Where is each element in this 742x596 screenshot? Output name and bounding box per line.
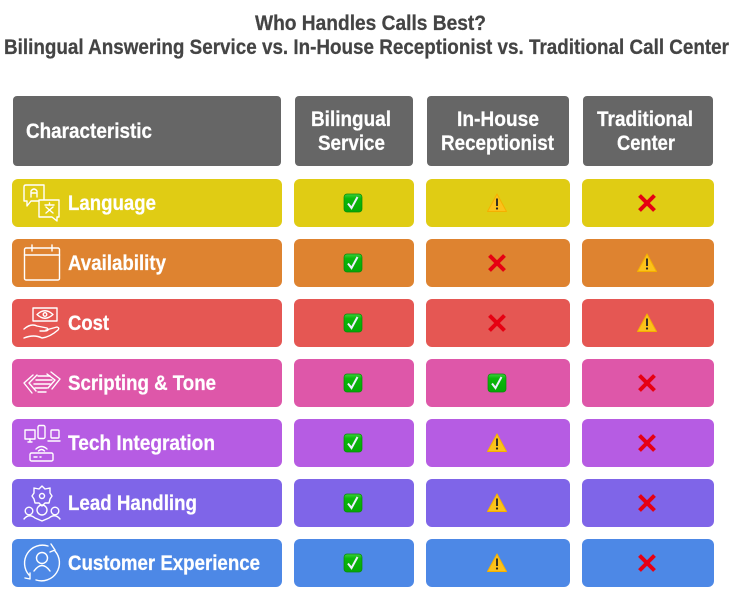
header: characteristic: Characteristic xyxy=(26,120,152,143)
row: availability: Availability xyxy=(68,252,166,275)
header: bilingual service: Service xyxy=(318,132,385,155)
row: scripting & tone xyxy=(12,359,714,407)
header: bilingual service xyxy=(295,96,413,166)
title xyxy=(4,12,729,59)
row: customer experience: Customer Experience xyxy=(68,552,260,575)
row: language: Language xyxy=(68,192,156,215)
row: customer experience xyxy=(12,539,714,587)
icon: hand holding money xyxy=(24,308,59,338)
header: in-house receptionist: Receptionist xyxy=(441,132,554,155)
row: cost: Cost xyxy=(68,312,109,335)
icon: customer cycle xyxy=(25,544,59,581)
row: availability xyxy=(12,239,714,287)
icon: scripting arrows xyxy=(24,372,60,393)
header: characteristic xyxy=(13,96,281,166)
icon: translation bubbles xyxy=(24,185,59,221)
row: lead handling: Lead Handling xyxy=(68,492,197,515)
row: tech integration: Tech Integration xyxy=(68,432,215,455)
header: bilingual service: Bilingual xyxy=(311,108,391,131)
icon: gear and people xyxy=(24,486,60,521)
title: Who Handles Calls Best? xyxy=(255,12,486,35)
row: scripting & tone: Scripting & Tone xyxy=(68,372,216,395)
row: language xyxy=(12,179,714,227)
header: traditional center: Traditional xyxy=(597,108,693,131)
row: cost xyxy=(12,299,714,347)
header: in-house receptionist xyxy=(427,96,569,166)
icon: connected devices xyxy=(25,426,60,461)
row: tech integration xyxy=(12,419,714,467)
header: traditional center xyxy=(583,96,713,166)
header row xyxy=(13,96,713,166)
icon: calendar xyxy=(24,245,60,280)
header: traditional center: Center xyxy=(617,132,675,155)
row: lead handling xyxy=(12,479,714,527)
header: in-house receptionist: In-House xyxy=(457,108,539,131)
